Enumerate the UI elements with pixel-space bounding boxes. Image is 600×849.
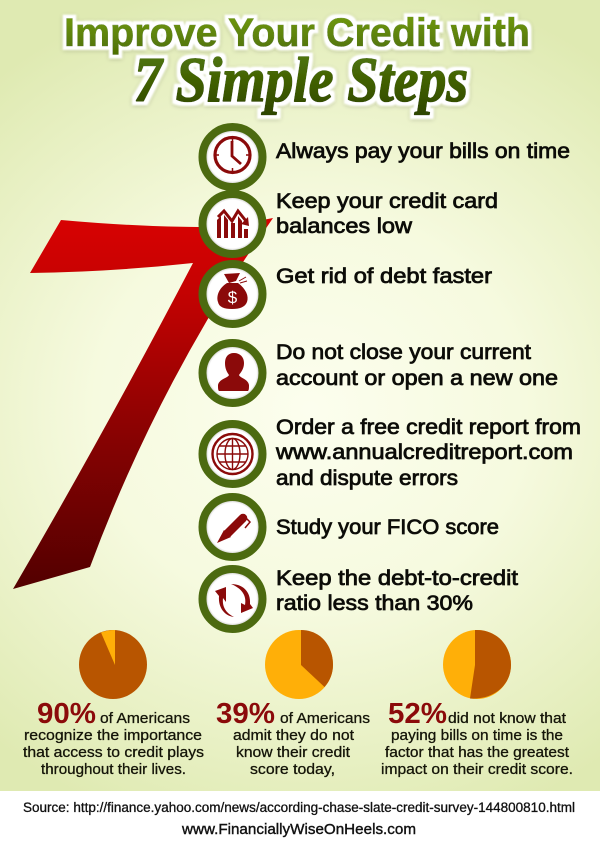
stat: 90%: that access to credit plays [23, 744, 204, 761]
title line 2: 7 Simple Steps [134, 45, 468, 115]
pie chart: 52% [443, 630, 511, 699]
stat: 52%: paying bills on time is the [391, 727, 563, 744]
icon: money bag [217, 273, 248, 309]
step text [276, 341, 558, 390]
stat: 90%: throughout their lives. [41, 761, 186, 778]
icon: clock [215, 138, 250, 172]
step text: and dispute errors [276, 467, 458, 490]
icon ring [202, 127, 262, 187]
icon ring [202, 424, 262, 484]
stat: 52%: factor that has the greatest [385, 744, 570, 761]
step 3: money bag [202, 264, 492, 324]
icon: cycle arrows [215, 584, 253, 617]
stat: 39%: of Americans [280, 710, 370, 727]
step 7: cycle arrows [202, 567, 518, 629]
stat: 90%: 90% [37, 698, 96, 730]
stat: 52%: did not know that [448, 710, 567, 727]
step 4: person [202, 341, 558, 403]
step text: Always pay your bills on time [276, 140, 570, 163]
step 6: pen [202, 497, 499, 557]
stat: 52%: impact on their credit score. [381, 761, 573, 778]
source line: Source: http://finance.yahoo.com/news/according-chase-slate-credit-survey-144800810.html [23, 800, 575, 815]
step text: www.annualcreditreport.com [275, 441, 573, 464]
stat: 39%: 39% [216, 698, 275, 730]
step text: account or open a new one [276, 367, 558, 390]
step text: Study your FICO score [276, 516, 499, 539]
icon: globe [212, 434, 252, 474]
icon: person [218, 353, 249, 391]
big red number 7 [13, 218, 273, 589]
website: www.FinanciallyWiseOnHeels.com [181, 821, 416, 838]
step text: Get rid of debt faster [276, 265, 492, 288]
step text: Do not close your current [276, 341, 531, 364]
step text [276, 567, 518, 615]
pie chart: 90% [79, 630, 147, 699]
icon: pen [217, 515, 250, 543]
icon ring [202, 264, 262, 324]
icon ring [202, 194, 262, 254]
stat: 90%: recognize the importance [24, 727, 202, 744]
icon ring [202, 569, 262, 629]
icon ring [202, 497, 262, 557]
title line 1: Improve Your Credit with [64, 11, 530, 55]
step text: Keep the debt-to-credit [276, 567, 518, 590]
icon: money bag: $ [228, 288, 238, 307]
stat: 90% [23, 698, 204, 778]
step text [276, 190, 498, 238]
stat: 39%: score today, [250, 761, 335, 778]
stat: 39% [216, 698, 370, 778]
pie chart: 39% [265, 630, 333, 699]
step text: ratio less than 30% [276, 592, 473, 615]
stat: 52%: 52% [388, 698, 447, 730]
step 2: chart [202, 190, 498, 254]
stat: 52% [381, 698, 573, 778]
icon ring [202, 343, 262, 403]
step text: balances low [276, 215, 413, 238]
stat: 39%: admit they do not [233, 727, 355, 744]
icon: falling chart [217, 211, 249, 238]
step text: Order a free credit report from [276, 416, 581, 439]
step 1: clock [202, 127, 570, 187]
step text [275, 416, 581, 490]
step text: Keep your credit card [276, 190, 498, 213]
step 5: globe [202, 416, 581, 490]
title [64, 11, 530, 115]
stat: 90%: of Americans [100, 710, 190, 727]
stat: 39%: know their credit [236, 744, 351, 761]
